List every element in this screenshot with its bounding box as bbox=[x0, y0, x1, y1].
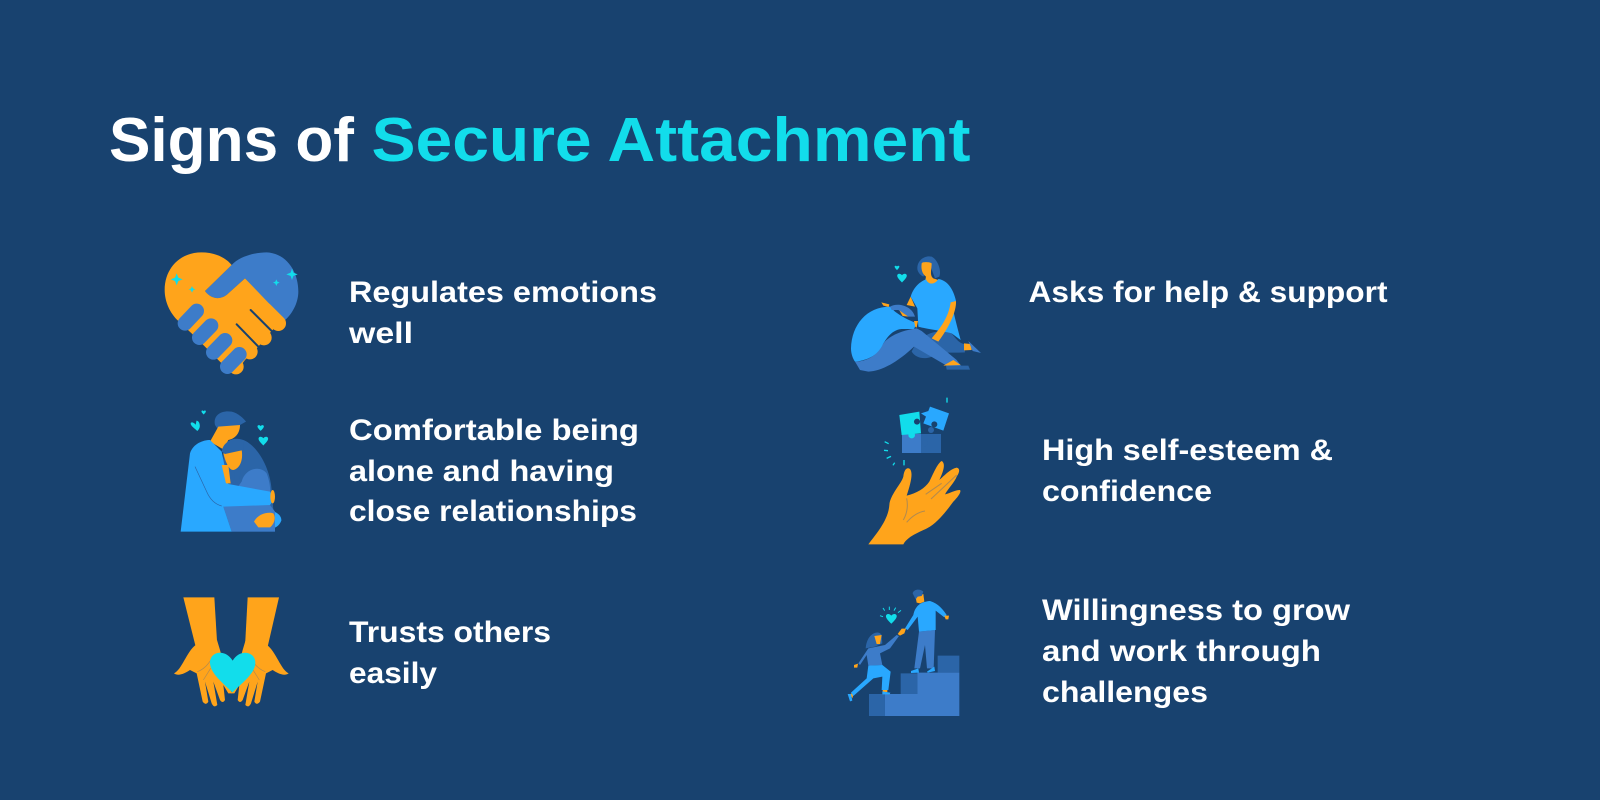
label: high self-esteem bbox=[1042, 434, 1333, 508]
label: asks for help: Asks for help & support bbox=[1028, 276, 1388, 309]
label: comfortable being alone: Comfortable being bbox=[349, 414, 639, 447]
label: trusts others bbox=[349, 616, 551, 690]
icon: handshake heart bbox=[165, 252, 298, 373]
label: trusts others: Trusts others bbox=[349, 616, 551, 649]
label: regulates emotions: Regulates emotions bbox=[349, 276, 657, 309]
icon: embracing couple bbox=[181, 411, 281, 532]
label: comfortable being alone: close relationships bbox=[349, 495, 637, 528]
title bbox=[109, 106, 970, 175]
icon: open hands holding heart bbox=[174, 597, 289, 706]
label: high self-esteem: High self-esteem & bbox=[1042, 434, 1333, 467]
title: Signs of bbox=[109, 106, 354, 175]
title: Secure Attachment bbox=[372, 106, 970, 175]
label: regulates emotions bbox=[348, 276, 657, 350]
label: comfortable being alone bbox=[349, 414, 639, 528]
label: willingness to grow: Willingness to grow bbox=[1042, 594, 1351, 627]
label: comfortable being alone: alone and having bbox=[349, 455, 614, 488]
label: willingness to grow: challenges bbox=[1042, 676, 1208, 709]
label: regulates emotions: well bbox=[348, 317, 413, 350]
icon: person helping another up stairs bbox=[848, 590, 959, 716]
label: willingness to grow bbox=[1042, 594, 1351, 709]
label: trusts others: easily bbox=[349, 657, 437, 690]
label: high self-esteem: confidence bbox=[1042, 475, 1212, 508]
label: willingness to grow: and work through bbox=[1042, 635, 1321, 668]
icon: hand with puzzle pieces bbox=[868, 398, 960, 544]
icon: woman comforting friend bbox=[851, 256, 981, 372]
